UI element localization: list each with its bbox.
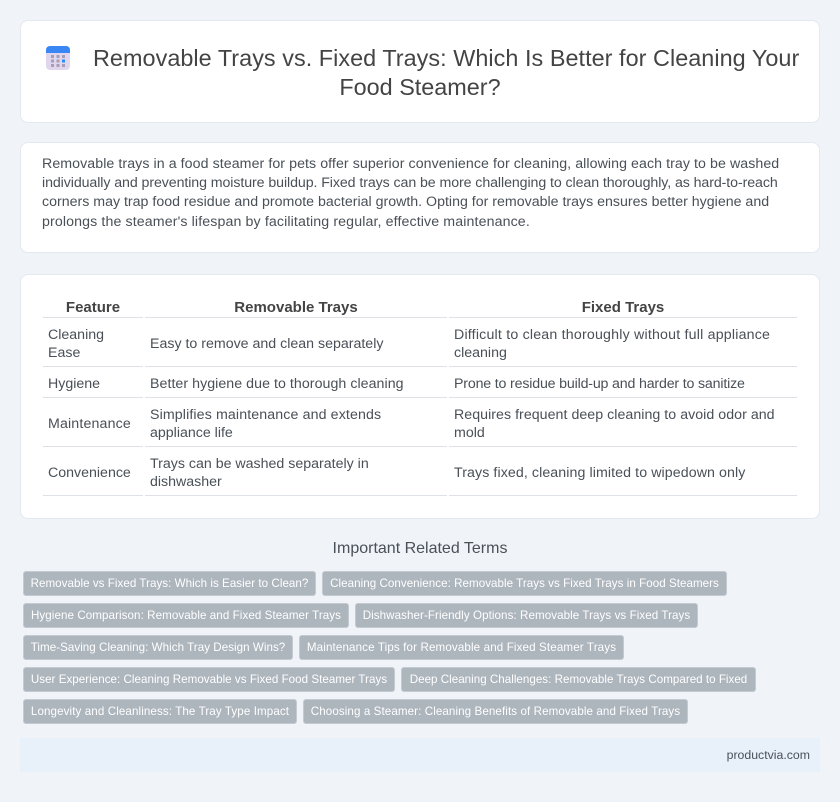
text: Ease: [48, 345, 80, 361]
text: Longevity and Cleanliness: The Tray Type Impact: [31, 705, 289, 718]
footer source: productvia.com: [727, 748, 810, 762]
text: Trays fixed, cleaning limited to wipedown only: [454, 465, 745, 481]
footer bar: [20, 738, 820, 772]
icon: calendar: [46, 46, 70, 70]
text: mold: [454, 425, 485, 441]
panel: comparison table: [20, 274, 820, 519]
text: prolongs the steamer's lifespan by facilitating regular, effective maintenance.: [42, 214, 530, 230]
text: Removable Trays: [234, 299, 358, 316]
text: Time-Saving Cleaning: Which Tray Design Wins?: [31, 641, 285, 654]
text: Choosing a Steamer: Cleaning Benefits of Removable and Fixed Trays: [311, 705, 680, 718]
text: Maintenance Tips for Removable and Fixed Steamer Trays: [307, 641, 616, 654]
text: Removable trays in a food steamer for pets offer superior convenience for cleaning, allowing each tray to be washed: [42, 156, 779, 172]
text: Deep Cleaning Challenges: Removable Trays Compared to Fixed: [410, 673, 747, 686]
text: Removable vs Fixed Trays: Which is Easier to Clean?: [31, 577, 308, 590]
text: corners may trap food residue and promote bacterial growth. Opting for removable trays ensures better hygiene and: [42, 194, 769, 210]
heading: important related terms: Important Related Terms: [333, 540, 507, 557]
table row: convenience: [48, 456, 746, 490]
table header: [66, 299, 664, 316]
text: Easy to remove and clean separately: [150, 336, 383, 352]
table row: maintenance: [48, 407, 775, 441]
text: Difficult to clean thoroughly without full appliance: [454, 327, 770, 343]
text: Dishwasher-Friendly Options: Removable Trays vs Fixed Trays: [363, 609, 690, 622]
panel: intro paragraph: [20, 142, 820, 253]
text: Food Steamer?: [339, 74, 501, 100]
text: Maintenance: [48, 416, 131, 432]
panel: title card: [20, 20, 820, 123]
text: Cleaning: [48, 327, 104, 343]
table row: cleaning ease: [48, 327, 770, 361]
related term tags: [23, 571, 756, 724]
intro text: [42, 156, 779, 230]
text: Simplifies maintenance and extends: [150, 407, 381, 423]
text: dishwasher: [150, 474, 222, 490]
text: Better hygiene due to thorough cleaning: [150, 376, 404, 392]
text: appliance life: [150, 425, 233, 441]
text: Cleaning Convenience: Removable Trays vs Fixed Trays in Food Steamers: [330, 577, 719, 590]
title: [93, 45, 799, 100]
text: Removable Trays vs. Fixed Trays: Which Is Better for Cleaning Your: [93, 45, 799, 71]
text: Hygiene Comparison: Removable and Fixed Steamer Trays: [31, 609, 341, 622]
table row: hygiene: [48, 376, 745, 392]
text: Fixed Trays: [582, 299, 664, 316]
text: Hygiene: [48, 376, 100, 392]
text: individually and preventing moisture buildup. Fixed trays can be more challenging to clean thoroughly, as hard-to-reach: [42, 175, 778, 191]
text: Trays can be washed separately in: [150, 456, 369, 472]
text: cleaning: [454, 345, 507, 361]
text: User Experience: Cleaning Removable vs Fixed Food Steamer Trays: [31, 673, 387, 686]
text: Feature: [66, 299, 120, 316]
table rules: [43, 317, 797, 496]
text: Requires frequent deep cleaning to avoid odor and: [454, 407, 775, 423]
text: Convenience: [48, 465, 131, 481]
text: Prone to residue build-up and harder to sanitize: [454, 376, 745, 392]
